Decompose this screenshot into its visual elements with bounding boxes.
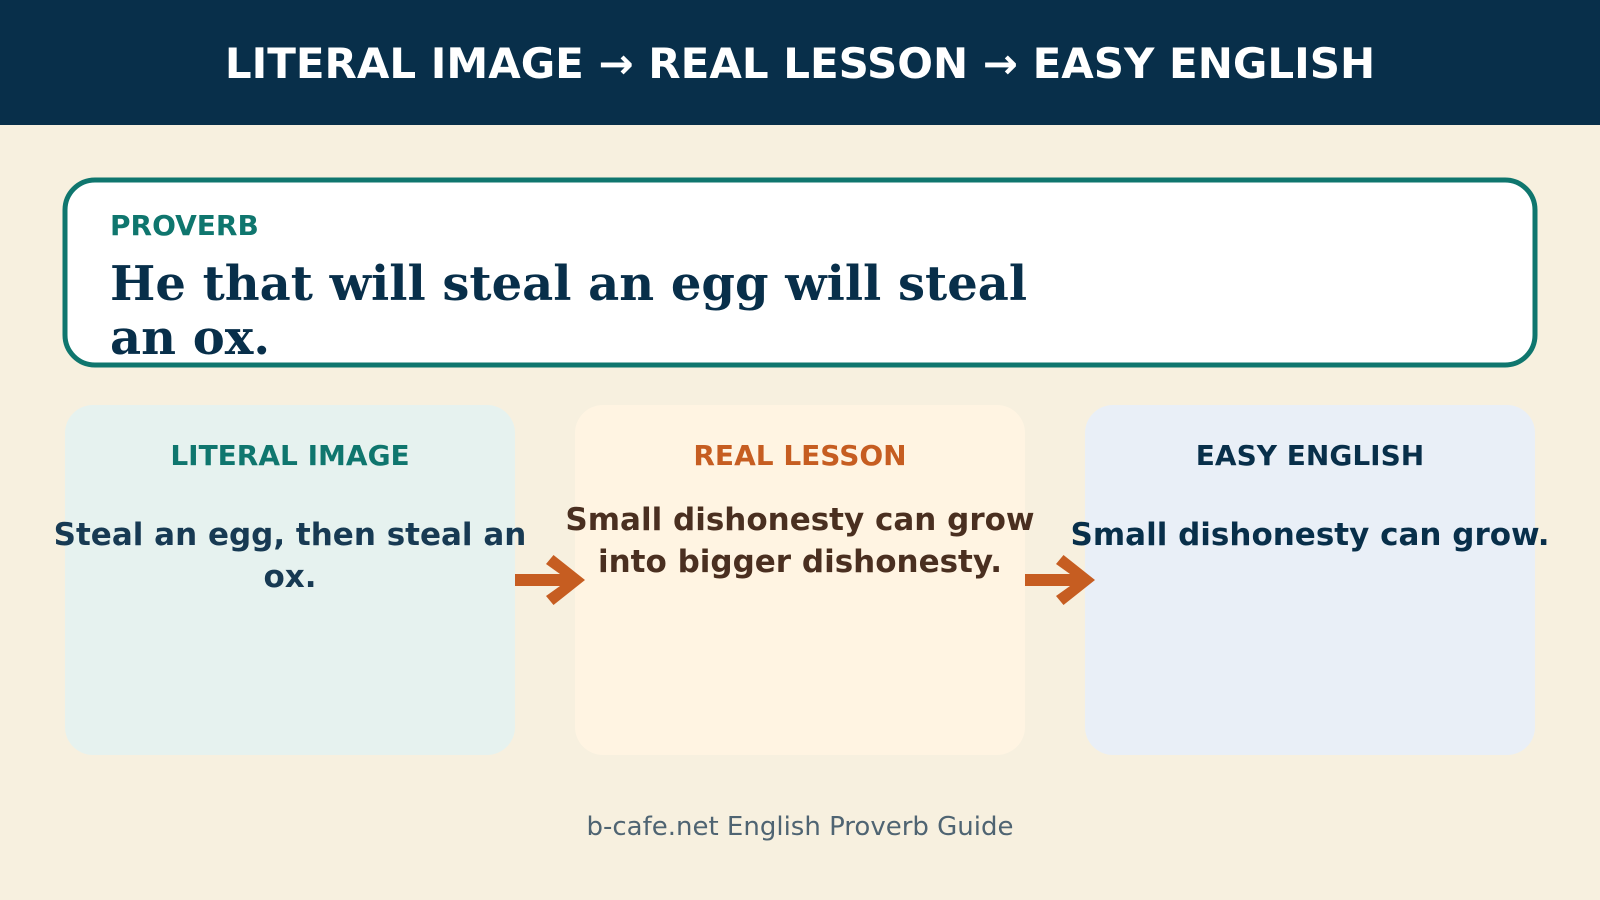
proverb label: PROVERB bbox=[110, 209, 259, 242]
panel: literal image bbox=[54, 405, 526, 755]
literal image text: Steal an egg, then steal an bbox=[54, 517, 526, 553]
footer: b-cafe.net English Proverb Guide bbox=[586, 812, 1014, 842]
arrow: literal image to real lesson bbox=[515, 555, 585, 605]
easy english heading: EASY ENGLISH bbox=[1196, 439, 1424, 472]
real lesson text: Small dishonesty can grow bbox=[565, 502, 1035, 538]
panel: proverb bbox=[65, 180, 1535, 366]
arrow: real lesson to easy english bbox=[1025, 555, 1095, 605]
proverb text: He that will steal an egg will steal bbox=[110, 256, 1027, 312]
panel: easy english bbox=[1071, 405, 1549, 755]
real lesson text: into bigger dishonesty. bbox=[598, 544, 1002, 580]
easy english text: Small dishonesty can grow. bbox=[1071, 517, 1549, 553]
proverb text: an ox. bbox=[110, 310, 270, 366]
title: LITERAL IMAGE → REAL LESSON → EASY ENGLISH bbox=[225, 39, 1375, 88]
panel: real lesson bbox=[565, 405, 1035, 755]
real lesson heading: REAL LESSON bbox=[693, 439, 907, 472]
header banner bbox=[0, 0, 1600, 125]
literal image text: ox. bbox=[263, 559, 317, 595]
literal image heading: LITERAL IMAGE bbox=[170, 439, 410, 472]
